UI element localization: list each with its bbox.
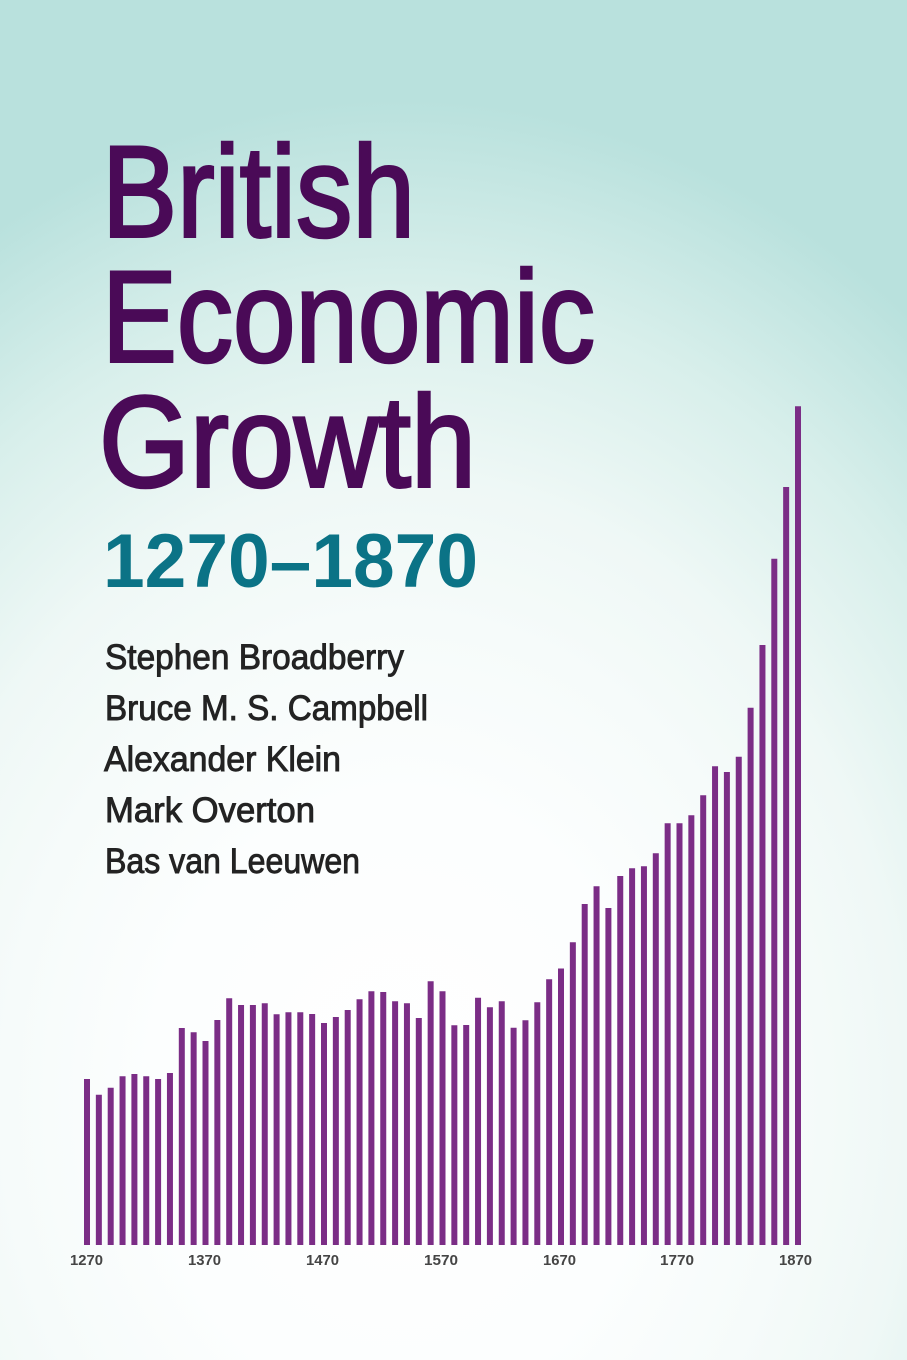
axis labels: 1670 [543,1253,576,1269]
authors: Stephen Broadberry [105,638,404,677]
authors: Bas van Leeuwen [105,842,360,881]
title: Growth [99,368,476,514]
axis labels: 1270 [70,1253,103,1269]
authors: Alexander Klein [104,740,341,779]
authors: Bruce M. S. Campbell [105,689,428,728]
axis labels [70,1253,812,1269]
bar chart [87,406,798,1245]
axis labels: 1570 [424,1253,458,1269]
title [99,118,595,514]
authors: Mark Overton [105,791,315,830]
axis labels: 1370 [188,1253,221,1269]
title: British [102,118,415,264]
axis labels: 1470 [306,1253,339,1269]
title: Economic [102,244,595,390]
axis labels: 1770 [660,1253,694,1269]
authors [104,638,428,881]
axis labels: 1870 [779,1253,812,1269]
subtitle: date range: 1270–1870 [103,519,478,604]
